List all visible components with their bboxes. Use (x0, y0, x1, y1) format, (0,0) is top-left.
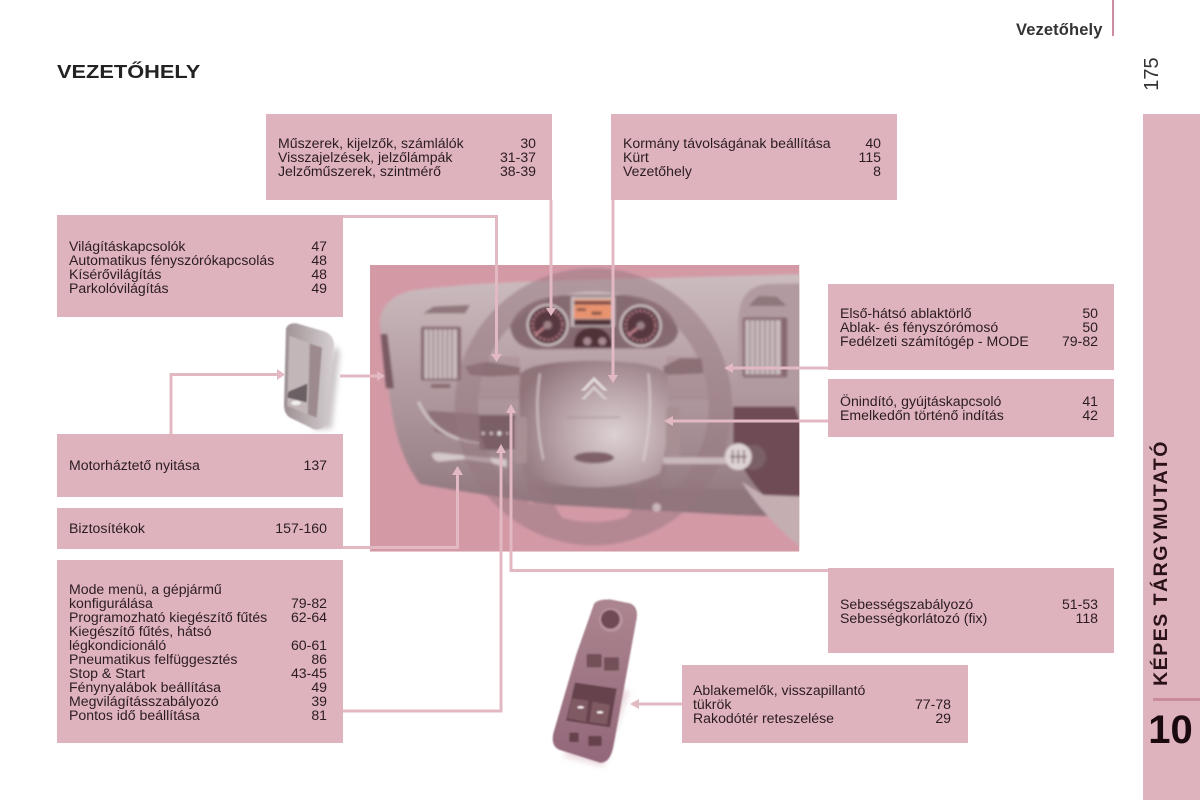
panel: lights: 47 (311, 238, 327, 254)
gear well (733, 407, 803, 497)
panel: instruments: Visszajelzések, jelzőlámpák (278, 149, 452, 165)
panel: instruments: 38-39 (500, 163, 536, 179)
panel: mode menu: Megvilágításszabályozó (69, 693, 219, 709)
arrow: ignition (664, 416, 828, 426)
lower dash band (530, 487, 753, 515)
display (571, 297, 615, 327)
panel: lights: Automatikus fényszórókapcsolás (69, 252, 274, 268)
panel: ignition: Emelkedőn történő indítás (840, 407, 1004, 423)
panel: mode menu: Fénynyalábok beállítása (69, 679, 221, 695)
panel: mode menu: légkondicionáló (69, 637, 166, 653)
panel: steering wheel: 115 (859, 149, 881, 165)
panel: lights: 48 (311, 252, 327, 268)
running header: Vezetőhely (1016, 21, 1102, 39)
panel: mode menu: Pontos idő beállítása (69, 707, 200, 723)
panel: mode menu: Programozható kiegészítő fűtés (69, 609, 267, 625)
window switch panel (553, 599, 637, 767)
panel: cruise control: 51-53 (1062, 596, 1098, 612)
panel: lights: 49 (311, 280, 327, 296)
left gauge (527, 304, 569, 346)
panel: instruments: Műszerek, kijelzők, számlálók (278, 135, 464, 151)
panel: steering wheel: 40 (865, 135, 881, 151)
panel: wipers: 50 (1082, 305, 1098, 321)
right vent (738, 283, 800, 379)
bonnet release latch (284, 323, 340, 430)
steering hub (519, 361, 669, 487)
panel: wipers: Ablak- és fényszórómosó (840, 319, 998, 335)
panel: wipers: 50 (1082, 319, 1098, 335)
title: VEZETŐHELY (57, 62, 200, 82)
panel: steering wheel: Kormány távolságának beállítása (623, 135, 831, 151)
panel: wipers: 79-82 (1062, 333, 1098, 349)
panel: cruise control (828, 568, 1114, 653)
panel: mode menu: Mode menü, a gépjármű (69, 581, 222, 597)
panel: mode menu: 60-61 (291, 637, 327, 653)
arrow: windows (630, 699, 682, 709)
wheel switches (666, 408, 678, 455)
arrow: fuses (343, 466, 463, 548)
panel: mode menu: Kiegészítő fűtés, hátsó (69, 623, 212, 639)
panel: ignition: 42 (1082, 407, 1098, 423)
panel: fuses (57, 508, 343, 549)
panel: steering wheel: Kürt (623, 149, 649, 165)
small buttons (587, 654, 602, 667)
panel: instruments: 31-37 (500, 149, 536, 165)
side tab (1143, 114, 1200, 800)
header accent bar (1112, 0, 1114, 36)
panel: wipers (828, 284, 1114, 370)
panel: windows: tükrök (693, 696, 731, 712)
arrow: lights (343, 216, 502, 362)
callout arrows (171, 200, 828, 711)
panel: windows (682, 665, 968, 743)
panel: lights: Parkolóvilágítás (69, 280, 168, 296)
switch panel (479, 415, 516, 450)
section number: 10 (1148, 708, 1193, 752)
panel: ignition: 41 (1082, 393, 1098, 409)
panel: ignition: Önindító, gyújtáskapcsoló (840, 393, 1001, 409)
panel: windows: 77-78 (915, 696, 951, 712)
arrow: latch to dashboard (340, 371, 385, 381)
panel: mode menu: 39 (311, 693, 327, 709)
panel: cruise control: Sebességkorlátozó (fix) (840, 610, 987, 626)
lower trim (742, 482, 803, 547)
dashboard body (380, 274, 803, 517)
panel: mode menu: konfigurálása (69, 595, 153, 611)
panel: windows: Rakodótér reteszelése (693, 710, 834, 726)
panel: mode menu: Stop & Start (69, 665, 145, 681)
panel: mode menu (57, 560, 343, 743)
panel: mode menu: 43-45 (291, 665, 327, 681)
panel: steering wheel: Vezetőhely (623, 163, 692, 179)
panel: cruise control: Sebességszabályozó (840, 596, 973, 612)
left side slot (381, 334, 394, 388)
panel: instruments (266, 114, 552, 200)
panel: mode menu: 62-64 (291, 609, 327, 625)
window buttons (566, 683, 617, 727)
panel: mode menu: Pneumatikus felfüggesztés (69, 651, 237, 667)
stalks (465, 362, 520, 377)
section title: KÉPES TÁRGYMUTATÓ (1150, 440, 1172, 686)
panel: instruments: Jelzőműszerek, szintmérő (278, 163, 441, 179)
lower gauge (574, 327, 612, 347)
panel: bonnet: 137 (303, 457, 327, 473)
left recess (428, 410, 481, 441)
arrow: mode menu (343, 444, 506, 711)
trim highlight (418, 402, 513, 450)
panel: steering wheel (611, 114, 897, 200)
panel: lights: Világításkapcsolók (69, 238, 185, 254)
badge (574, 452, 614, 463)
panel: fuses: Biztosítékok (69, 520, 145, 536)
illustrations and arrows layer (170, 200, 828, 768)
panel: steering wheel: 8 (873, 163, 881, 179)
panel: ignition (828, 379, 1114, 437)
panel: lights: 48 (311, 266, 327, 282)
lock buttons (569, 733, 579, 742)
panel: cruise control: 118 (1076, 610, 1098, 626)
right gauge (620, 305, 662, 347)
section divider (1153, 698, 1200, 701)
panel: mode menu: 86 (311, 651, 327, 667)
panel: instruments: 30 (520, 135, 536, 151)
brand chevrons (581, 377, 608, 391)
dashboard photo (370, 265, 803, 552)
panel: wipers: Fedélzeti számítógép - MODE (840, 333, 1029, 349)
instrument pod (510, 295, 678, 349)
panel: bonnet (57, 434, 343, 497)
steering wheel rim (466, 280, 720, 534)
panel: lights (57, 215, 343, 317)
gear knob (663, 457, 730, 464)
left vent (421, 305, 470, 388)
arrow: bonnet to latch (171, 369, 285, 434)
panel: fuses: 157-160 (275, 520, 327, 536)
panel: mode menu: 49 (311, 679, 327, 695)
panel: mode menu: 79-82 (291, 595, 327, 611)
panel: windows: Ablakemelők, visszapillantó (693, 682, 865, 698)
rim glint (652, 503, 661, 512)
page number: 175 (1141, 57, 1163, 91)
arrow: steering wheel (608, 200, 618, 383)
panel: lights: Kísérővilágítás (69, 266, 161, 282)
panel: mode menu: 81 (311, 707, 327, 723)
arrow: instruments (546, 200, 556, 316)
arrow: wipers (724, 363, 828, 373)
mirror knob (599, 608, 623, 632)
panel: windows: 29 (935, 710, 951, 726)
bonnet lever (432, 453, 507, 467)
panel: wipers: Első-hátsó ablaktörlő (840, 305, 972, 321)
panel: bonnet: Motorháztető nyitása (69, 457, 200, 473)
arrow: cruise control (506, 404, 828, 570)
